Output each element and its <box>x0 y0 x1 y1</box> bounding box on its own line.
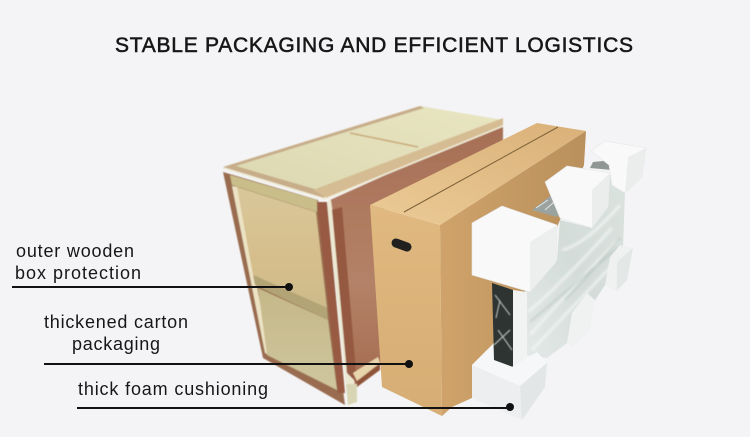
callout: thickened carton packaging <box>44 312 413 368</box>
crate front frame <box>317 200 380 405</box>
foam packed unit <box>472 141 646 420</box>
carton side face <box>440 131 586 416</box>
leader line <box>44 363 409 365</box>
foam block front bottom <box>472 345 547 420</box>
foam small block lower middle <box>567 293 595 347</box>
foam small block lower back <box>605 245 633 292</box>
wooden crate <box>223 106 503 405</box>
leader dot <box>506 403 514 411</box>
carton handle hole <box>396 243 407 247</box>
leader line <box>77 407 510 409</box>
leader dot <box>405 360 413 368</box>
crate side panel <box>223 172 345 405</box>
carton seam <box>404 127 558 212</box>
leader line <box>12 286 289 288</box>
crate right face <box>330 122 503 388</box>
carton top face <box>370 123 586 225</box>
foam block middle <box>545 166 610 228</box>
leader dot <box>285 283 293 291</box>
callout text: packaging: packaging <box>72 334 160 354</box>
callout text: box protection: box protection <box>15 263 141 283</box>
crate top panel <box>223 106 503 199</box>
callout text: outer wooden: outer wooden <box>16 241 134 261</box>
carton box <box>370 123 586 416</box>
callout: outer wooden box protection <box>12 241 293 291</box>
dark machine section <box>492 160 613 367</box>
callout text: thick foam cushioning <box>78 379 268 399</box>
callout text: thickened carton: thickened carton <box>44 312 188 332</box>
callout: thick foam cushioning <box>77 379 514 411</box>
title: STABLE PACKAGING AND EFFICIENT LOGISTICS <box>115 34 633 57</box>
plastic wrapped body <box>513 170 625 367</box>
carton front face <box>370 205 442 416</box>
foam block front top <box>472 206 557 292</box>
foam block back <box>591 141 646 193</box>
